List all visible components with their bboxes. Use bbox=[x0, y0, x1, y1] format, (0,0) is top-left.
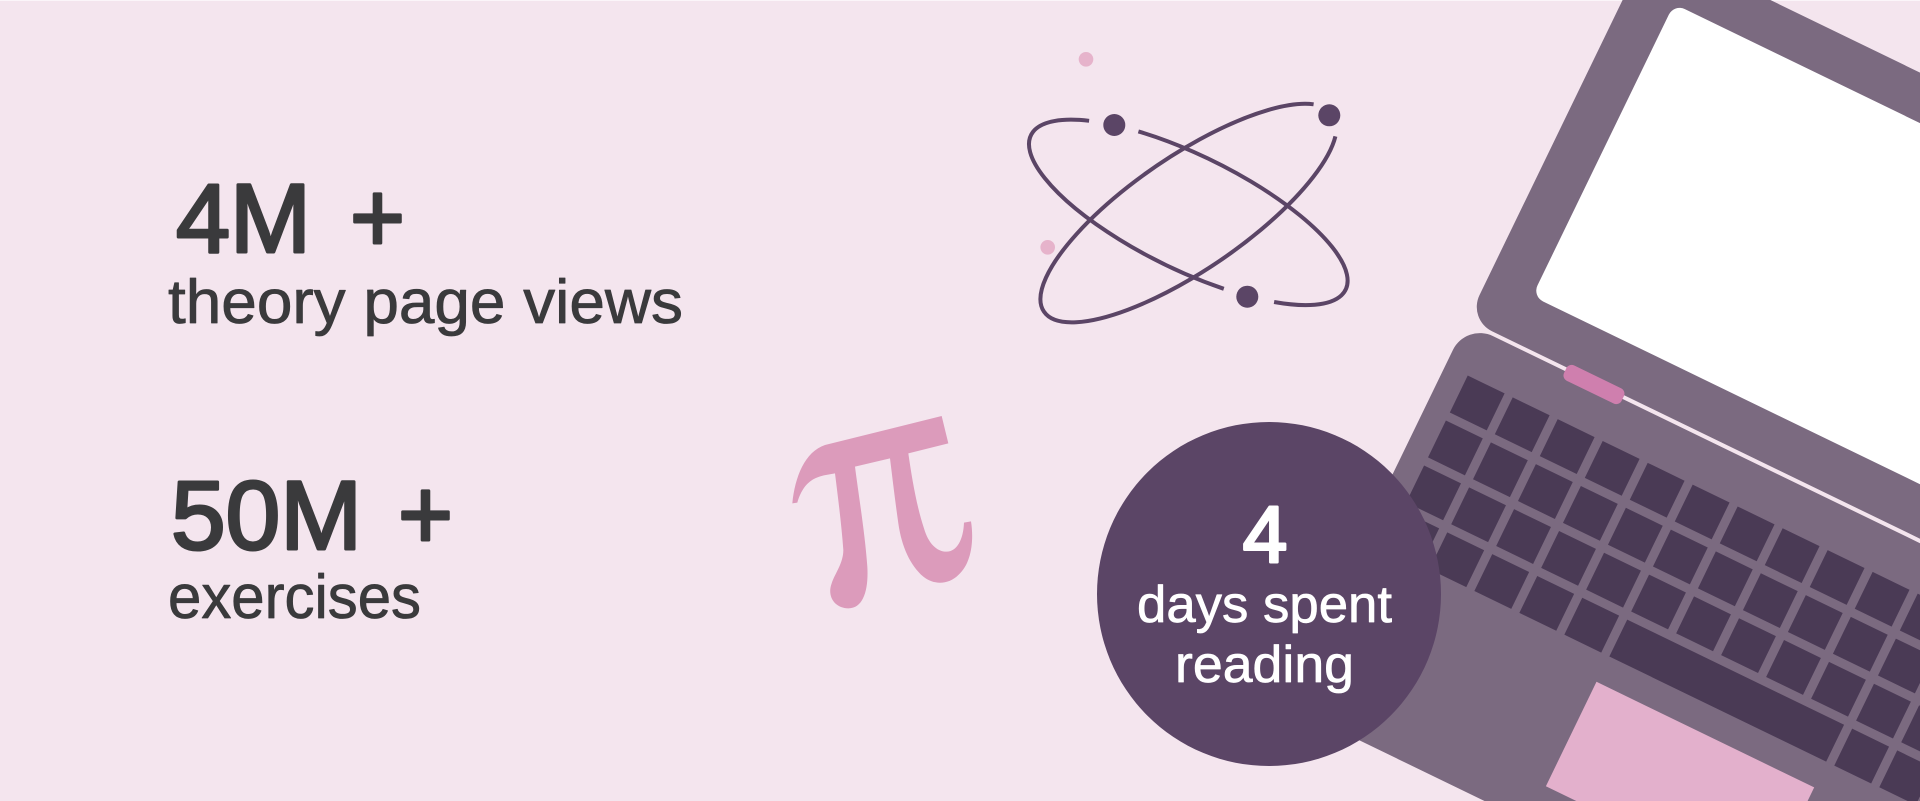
laptop illustration bbox=[1282, 0, 1920, 801]
stat label: theory page views: theory page views bbox=[168, 268, 683, 337]
callout label line one: days spent bbox=[1137, 576, 1393, 634]
laptop keyboard bbox=[1384, 376, 1920, 801]
laptop screen bbox=[1536, 8, 1920, 484]
callout number: 4 bbox=[1243, 490, 1287, 579]
laptop lid bbox=[1477, 0, 1920, 539]
laptop hinge bbox=[1561, 363, 1626, 406]
atom orbit one bbox=[1029, 120, 1348, 305]
stat number: 50M + bbox=[171, 459, 453, 571]
atom orbit two bbox=[1040, 104, 1335, 322]
stat: theory page views bbox=[168, 162, 683, 337]
stat number: 4M + bbox=[176, 162, 405, 274]
stat number: 4M +: + bbox=[350, 162, 405, 274]
laptop trackpad bbox=[1546, 682, 1814, 801]
callout circle bbox=[1097, 422, 1441, 766]
callout: 4 days spent reading bbox=[1097, 422, 1441, 766]
stat number: 50M +: + bbox=[398, 459, 453, 571]
icon: atom bbox=[1029, 52, 1348, 322]
atom electrons bbox=[1103, 104, 1340, 308]
callout label line two: reading bbox=[1175, 636, 1354, 694]
stat number: 50M +: 50M bbox=[171, 461, 362, 570]
stat number: 4M +: 4M bbox=[176, 164, 311, 273]
stat label: exercises: exercises bbox=[168, 563, 421, 632]
icon: pi symbol bbox=[792, 416, 972, 608]
stat: exercises bbox=[168, 459, 453, 632]
decorative pink dots bbox=[1040, 52, 1093, 255]
laptop base bbox=[1282, 333, 1920, 801]
